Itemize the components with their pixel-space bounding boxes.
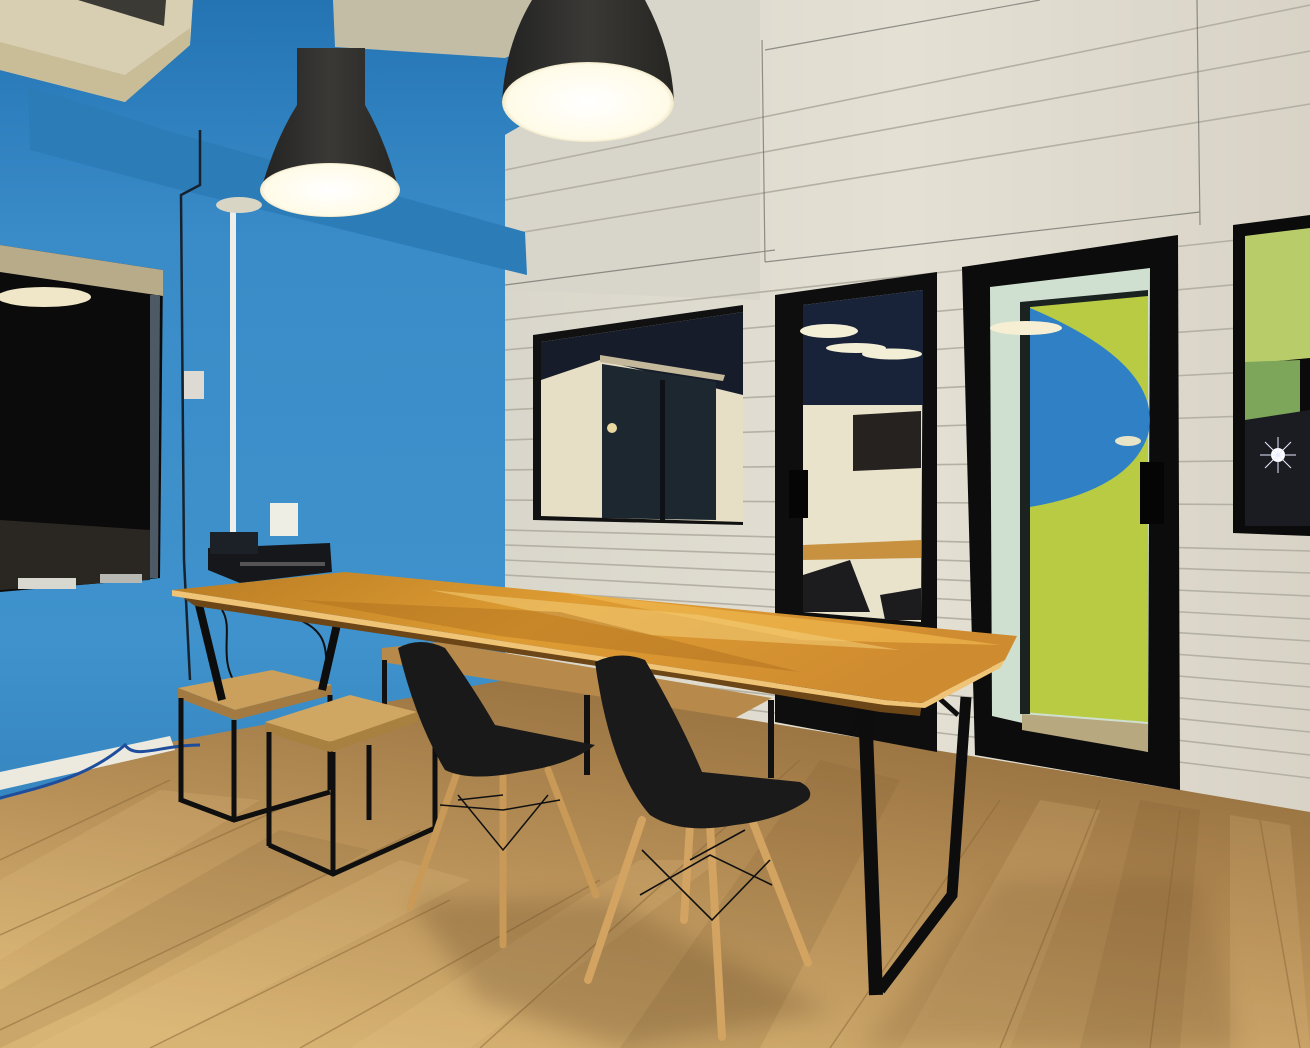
blue soffit box: [28, 86, 527, 275]
ceiling beam: [333, 0, 640, 58]
white speaker box: [270, 503, 298, 536]
middle interior window: [533, 305, 743, 525]
audio receiver: [208, 532, 332, 583]
stool left: [178, 670, 332, 822]
white plank wall: [505, 0, 1310, 815]
baseboard and cables: [0, 736, 200, 798]
chair back left: [398, 642, 596, 945]
pendant lamp right: [502, 0, 674, 142]
chair front right: [588, 655, 810, 1037]
table cables: [222, 610, 326, 690]
stool right: [265, 695, 435, 874]
table top: [172, 572, 1017, 716]
floor: [0, 680, 1310, 1048]
pendant lamp left: [260, 48, 400, 217]
right window: [1233, 215, 1310, 536]
left window: [0, 245, 163, 592]
middle glass door: [775, 272, 937, 752]
table legs: [199, 605, 966, 995]
wall thermostat: [184, 371, 204, 399]
blue wall: [0, 0, 520, 800]
wall cables: [181, 130, 200, 680]
back bench: [382, 642, 774, 778]
large glass door: [962, 235, 1180, 790]
white conduit and ceiling speaker: [216, 197, 262, 533]
air conditioner: [0, 0, 193, 102]
